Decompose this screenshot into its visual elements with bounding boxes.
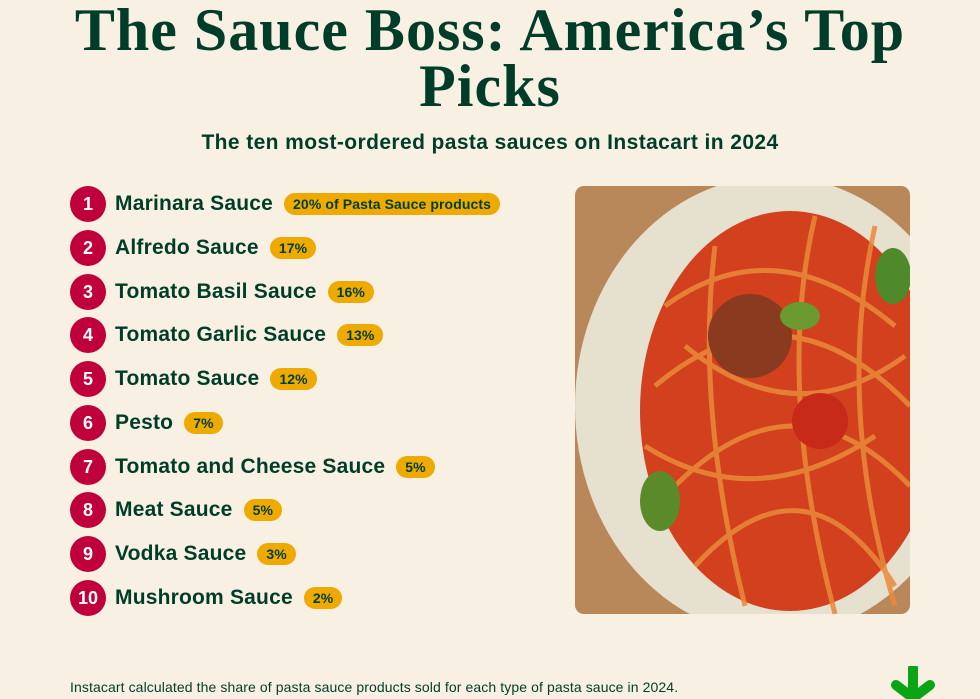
row 6: Pesto xyxy=(115,411,173,434)
row 2: Alfredo Sauce xyxy=(115,236,259,259)
row 6: 7% xyxy=(193,415,214,431)
row 2 xyxy=(70,230,316,266)
icon: down arrow xyxy=(891,666,935,699)
row 4: 4 xyxy=(83,324,93,344)
row 7: Tomato and Cheese Sauce xyxy=(115,455,385,478)
row 1: 20% of Pasta Sauce products xyxy=(293,196,491,212)
row 3 xyxy=(70,274,374,310)
row 8: 8 xyxy=(83,500,93,520)
row 4: 13% xyxy=(346,327,374,343)
photo: spaghetti plate xyxy=(575,186,910,614)
title: Picks xyxy=(419,53,561,119)
row 10: 2% xyxy=(313,590,333,606)
row 8 xyxy=(70,492,282,528)
row 3: 3 xyxy=(83,282,93,302)
row 9 xyxy=(70,536,296,572)
row 6 xyxy=(70,405,223,441)
row 4: Tomato Garlic Sauce xyxy=(115,323,326,346)
row 10: Mushroom Sauce xyxy=(115,586,293,609)
row 5: Tomato Sauce xyxy=(115,367,259,390)
row 8: 5% xyxy=(253,502,273,518)
row 3: Tomato Basil Sauce xyxy=(115,280,317,303)
row 9: 9 xyxy=(83,544,93,564)
row 9: 3% xyxy=(266,546,287,562)
row 4 xyxy=(70,317,383,353)
row 7: 5% xyxy=(405,459,426,475)
title xyxy=(75,0,905,119)
row 1: 1 xyxy=(83,194,93,214)
row 10 xyxy=(70,580,342,616)
row 2: 2 xyxy=(83,238,93,258)
row 3: 16% xyxy=(337,284,365,300)
row 5 xyxy=(70,361,317,397)
footnote: Instacart calculated the share of pasta sauce products sold for each type of pasta sauce in 2024. xyxy=(70,679,678,695)
row 1: Marinara Sauce xyxy=(115,192,273,215)
row 6: 6 xyxy=(83,412,93,432)
row 1 xyxy=(70,186,500,222)
ranked list xyxy=(70,186,500,616)
row 5: 12% xyxy=(279,371,308,387)
row 7: 7 xyxy=(83,456,93,476)
row 9: Vodka Sauce xyxy=(115,542,246,565)
row 5: 5 xyxy=(83,368,93,388)
row 2: 17% xyxy=(279,240,307,256)
row 8: Meat Sauce xyxy=(115,498,233,521)
row 10: 10 xyxy=(78,588,98,608)
row 7 xyxy=(70,449,435,485)
subtitle: The ten most-ordered pasta sauces on Instacart in 2024 xyxy=(201,131,779,154)
